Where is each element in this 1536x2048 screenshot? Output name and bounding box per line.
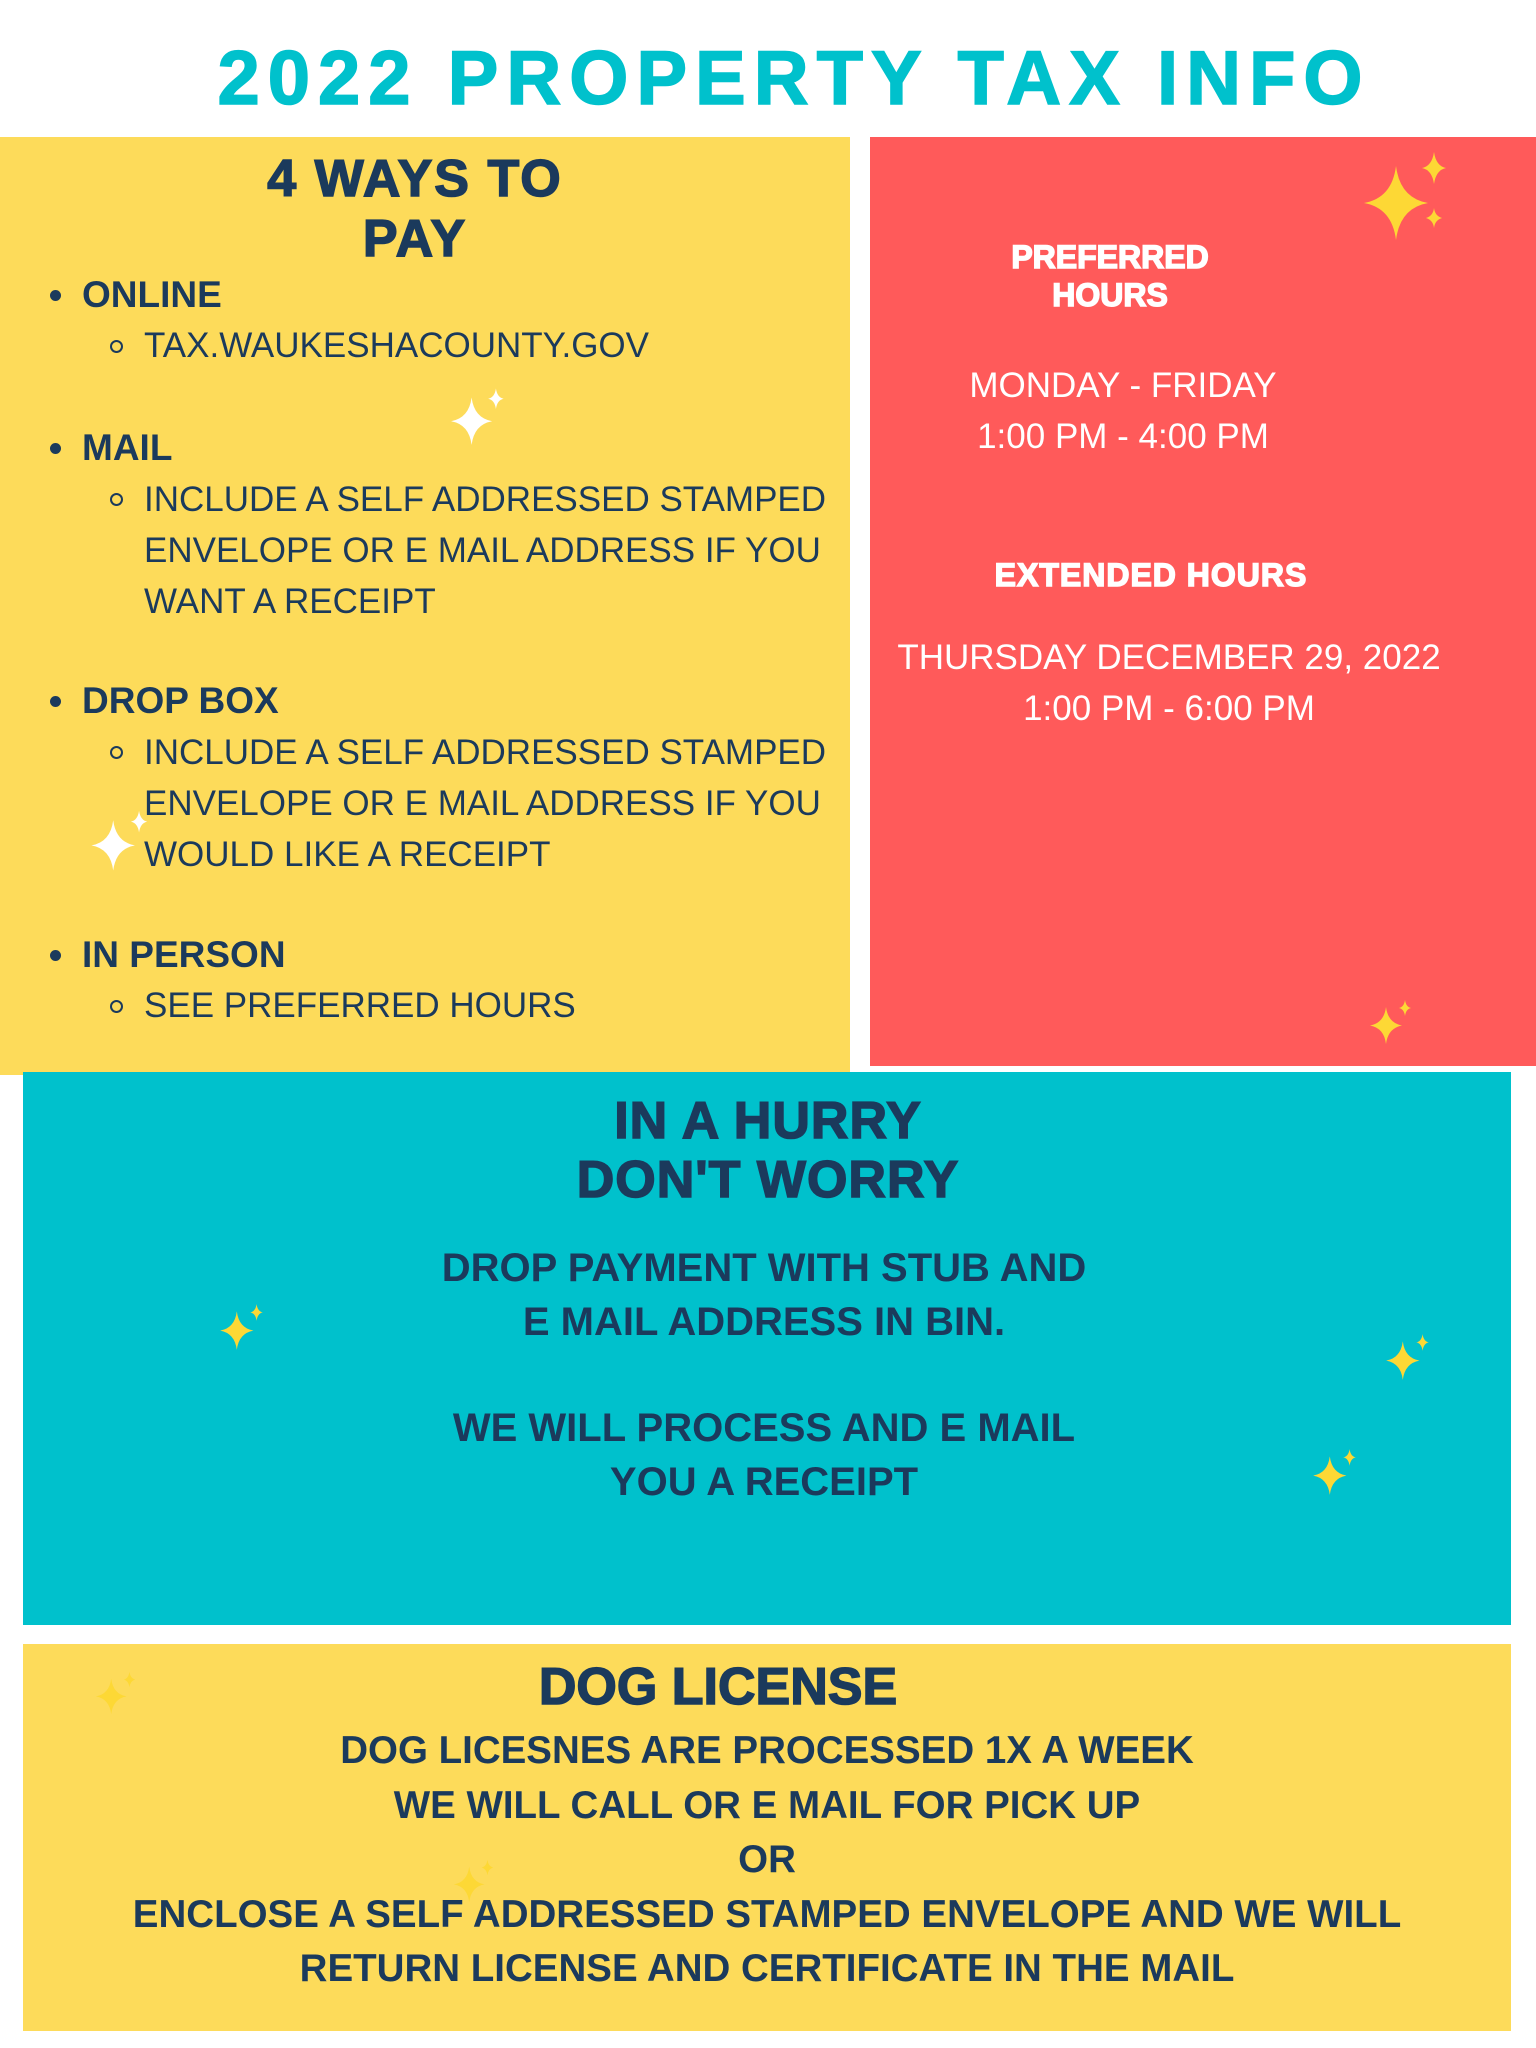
heading: in a hurry: DON'T WORRY xyxy=(577,1151,959,1209)
item: mail: INCLUDE A SELF ADDRESSED STAMPED xyxy=(144,480,826,519)
item: drop box xyxy=(50,680,826,874)
item: drop box: DROP BOX xyxy=(82,680,279,721)
heading: 4 ways to pay: PAY xyxy=(363,210,467,268)
icon: dog sparkle 2 xyxy=(454,1860,493,1902)
text: extended hours: THURSDAY DECEMBER 29, 2022 xyxy=(897,638,1441,677)
text: extended hours xyxy=(897,638,1441,728)
text: dog license details: ENCLOSE A SELF ADDRESSED STAMPED ENVELOPE AND WE WILL xyxy=(133,1892,1401,1936)
text: drop payment: E MAIL ADDRESS IN BIN. xyxy=(523,1300,1005,1344)
item: online: TAX.WAUKESHACOUNTY.GOV xyxy=(144,326,649,365)
panel: hours xyxy=(870,137,1536,1066)
title: 2022 PROPERTY TAX INFO xyxy=(217,36,1370,121)
icon: teal sparkle 2 xyxy=(1386,1334,1429,1380)
item: online: ONLINE xyxy=(82,274,222,315)
text: process: YOU A RECEIPT xyxy=(610,1460,918,1504)
heading: 4 ways to pay xyxy=(267,150,563,268)
item: online xyxy=(50,274,649,365)
item: mail: MAIL xyxy=(82,427,172,468)
heading: extended hours: EXTENDED HOURS xyxy=(995,557,1307,593)
item: mail: WANT A RECEIPT xyxy=(144,582,436,621)
text: dog license details: RETURN LICENSE AND CERTIFICATE IN THE MAIL xyxy=(300,1947,1234,1990)
text: weekday hours: MONDAY - FRIDAY xyxy=(969,366,1277,405)
text: dog license details xyxy=(133,1729,1401,1990)
item: drop box: ENVELOPE OR E MAIL ADDRESS IF YOU xyxy=(144,784,821,823)
item: in person: SEE PREFERRED HOURS xyxy=(144,986,576,1025)
icon: teal sparkle 3 xyxy=(1313,1449,1356,1495)
text: drop payment xyxy=(442,1246,1086,1344)
icon: teal sparkle 1 xyxy=(220,1304,263,1350)
text: weekday hours: 1:00 PM - 4:00 PM xyxy=(977,417,1269,456)
heading: in a hurry: IN A HURRY xyxy=(614,1092,922,1150)
icon: white sparkle 1 xyxy=(451,388,504,445)
text: process xyxy=(453,1406,1075,1504)
text: dog license details: OR xyxy=(738,1838,796,1881)
icon: big sparkle red panel xyxy=(1364,152,1446,240)
icon: white sparkle 2 xyxy=(92,810,147,870)
item: drop box: WOULD LIKE A RECEIPT xyxy=(144,835,550,874)
icon: dog sparkle 1 xyxy=(96,1672,135,1714)
item: mail xyxy=(50,427,826,621)
text: dog license details: WE WILL CALL OR E MAIL FOR PICK UP xyxy=(394,1784,1140,1826)
item: in person xyxy=(50,934,576,1025)
heading: dog license: DOG LICENSE xyxy=(539,1658,897,1716)
panel: dog license xyxy=(23,1644,1511,2031)
item: mail: ENVELOPE OR E MAIL ADDRESS IF YOU xyxy=(144,531,821,570)
panel: in a hurry xyxy=(23,1072,1511,1625)
item: drop box: INCLUDE A SELF ADDRESSED STAMPED xyxy=(144,733,826,772)
text: extended hours: 1:00 PM - 6:00 PM xyxy=(1023,689,1315,728)
item: in person: IN PERSON xyxy=(82,934,286,975)
heading: preferred hours xyxy=(1011,239,1209,313)
heading: preferred hours: HOURS xyxy=(1052,277,1168,313)
text: process: WE WILL PROCESS AND E MAIL xyxy=(453,1406,1075,1450)
text: weekday hours xyxy=(969,366,1277,456)
text: drop payment: DROP PAYMENT WITH STUB AND xyxy=(442,1246,1086,1290)
heading: 4 ways to pay: 4 WAYS TO xyxy=(267,150,563,208)
heading: in a hurry xyxy=(577,1092,959,1209)
text: dog license details: DOG LICESNES ARE PROCESSED 1X A WEEK xyxy=(340,1729,1194,1772)
icon: small sparkle red panel xyxy=(1370,1000,1411,1044)
heading: preferred hours: PREFERRED xyxy=(1011,239,1209,275)
panel: 4 ways to pay xyxy=(0,137,850,1075)
